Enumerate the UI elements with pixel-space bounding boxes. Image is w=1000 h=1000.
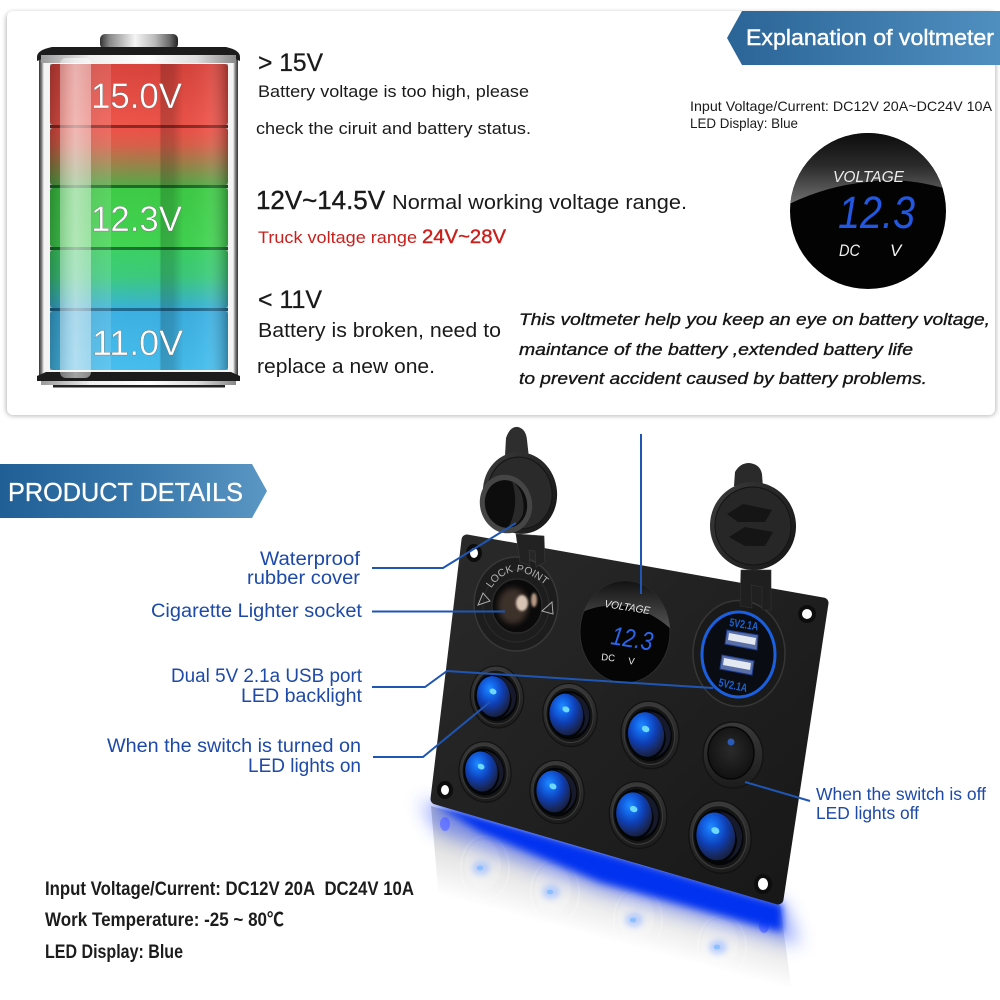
banner: product details — [0, 464, 267, 518]
text block: under 11V — [257, 286, 501, 378]
text block: voltmeter specs: Input Voltage/Current: DC12V 20A~DC24V 10A — [690, 98, 993, 114]
panel: explanation card — [6, 11, 996, 416]
label: lighter socket: Cigarette Lighter socket — [151, 601, 363, 622]
text block: voltmeter benefit: This voltmeter help you keep an eye on battery voltage, — [519, 310, 990, 329]
rubber cover: left socket — [474, 427, 564, 567]
label: USB port: Dual 5V 2.1a USB port — [171, 666, 363, 687]
blue under-glow — [420, 800, 800, 945]
text block: normal range — [256, 185, 687, 248]
callout labels: LED lights off — [816, 803, 919, 823]
icon: large voltmeter display: VOLTAGE — [833, 169, 904, 186]
panel voltmeter display — [578, 575, 672, 683]
text block: under 11V: Battery is broken, need to — [258, 320, 501, 342]
text block: under 11V: replace a new one. — [257, 356, 435, 378]
banner: explanation of voltmeter: Explanation of voltmeter — [746, 25, 994, 50]
text block: product specs: LED Display: Blue — [45, 942, 183, 963]
panel voltmeter display: VOLTAGE — [604, 598, 652, 617]
text block: normal range: Truck voltage range — [258, 228, 417, 247]
banner: explanation of voltmeter — [727, 11, 1000, 65]
battery label: 12.3V: 12.3V — [91, 200, 183, 239]
panel voltmeter display: V — [628, 656, 636, 668]
text block: under 11V: < 11V — [258, 286, 322, 314]
USB charger port: 5V2.1A — [717, 677, 748, 695]
battery label: 11.0V: 11.0V — [92, 324, 184, 363]
screw holes — [439, 546, 814, 892]
panel voltmeter display: 12.3 — [609, 620, 656, 657]
banner: product details: PRODUCT DETAILS — [8, 477, 243, 507]
icon: large voltmeter display: 12.3 — [838, 187, 915, 238]
callout labels: rubber cover — [247, 568, 361, 589]
battery label: 15.0V: 15.0V — [91, 77, 183, 116]
label: switch off: When the switch is off — [816, 784, 986, 804]
band: blue — [50, 311, 228, 370]
band: red to green — [50, 128, 228, 185]
cigarette lighter socket — [474, 556, 558, 652]
text block: voltmeter specs: LED Display: Blue — [690, 115, 798, 131]
callout labels — [107, 549, 986, 823]
callout lines — [372, 434, 810, 801]
band: green to blue — [50, 250, 228, 308]
icon: large voltmeter display — [790, 133, 946, 289]
text block: product specs: Work Temperature: -25 ~ 80℃ — [45, 910, 284, 931]
text block: voltmeter benefit — [519, 310, 990, 388]
text block: over 15V: > 15V — [258, 49, 323, 77]
text block: over 15V: check the ciruit and battery status. — [256, 119, 531, 138]
callout labels: LED lights on — [248, 756, 361, 777]
callout labels: LED backlight — [241, 686, 363, 707]
rocker switch: off — [703, 722, 763, 788]
label: waterproof cover: Waterproof — [260, 549, 361, 570]
band: green — [50, 188, 228, 247]
text block: voltmeter specs — [690, 98, 993, 131]
text block: voltmeter benefit: maintance of the battery ,extended battery life — [519, 340, 913, 359]
cigarette lighter socket: LOCK POINT — [486, 564, 550, 588]
text block: normal range: Normal working voltage range. — [392, 192, 687, 214]
icon: battery — [37, 34, 240, 388]
USB charger port: 5V2.1A — [729, 617, 759, 633]
rubber cover: right socket — [703, 463, 803, 610]
text block: product specs: Input Voltage/Current: DC12V 20A DC24V 10A — [45, 879, 414, 900]
icon: large voltmeter display: V — [890, 241, 903, 260]
text block: over 15V — [256, 49, 531, 138]
USB charger port — [693, 600, 785, 706]
panel voltmeter display: DC — [601, 652, 616, 664]
text block: product specs — [45, 879, 414, 963]
text block: over 15V: Battery voltage is too high, please — [258, 82, 529, 101]
control panel plate — [436, 540, 823, 899]
rocker switches: lit — [455, 663, 756, 877]
label: switch on: When the switch is turned on — [107, 736, 361, 757]
text block: normal range: 12V~14.5V — [256, 185, 386, 215]
panel reflection — [431, 806, 793, 1000]
text block: normal range: 24V~28V — [422, 227, 506, 248]
band: red — [50, 64, 228, 125]
band separators — [50, 125, 228, 311]
text block: voltmeter benefit: to prevent accident caused by battery problems. — [519, 369, 927, 388]
icon: large voltmeter display: DC — [839, 241, 861, 260]
